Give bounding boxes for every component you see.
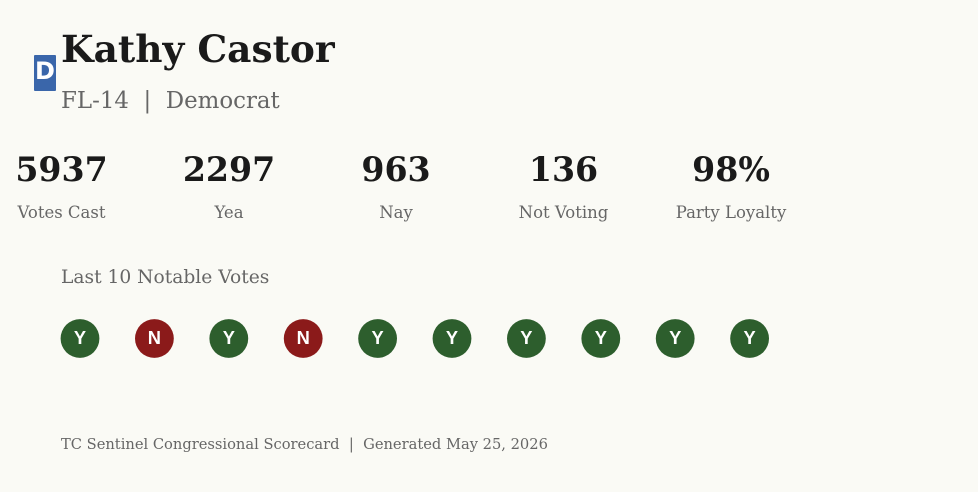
vote 6 yes: Y [446,327,458,348]
vote 6 yes [433,319,471,358]
vote 9 yes: Y [669,327,681,348]
vote 9 yes [656,319,695,358]
stat: party loyalty: 98% [692,150,770,189]
vote 1 yes [61,319,99,358]
vote 7 yes [507,319,546,358]
vote 8 yes [581,319,620,358]
party badge: D [35,57,55,85]
stat label: party loyalty: Party Loyalty [676,203,786,222]
stat: yea: 2297 [183,150,275,189]
vote 10 yes: Y [743,327,756,348]
stat label: nay: Nay [379,203,413,222]
vote 3 yes: Y [223,327,235,348]
vote 4 no: N [297,327,310,348]
vote 7 yes: Y [520,327,533,348]
vote 2 no [135,319,174,358]
stat: not voting: 136 [529,150,598,189]
vote 8 yes: Y [595,327,607,348]
stat label: not voting: Not Voting [519,203,608,222]
title: Kathy Castor [61,27,335,71]
stat label: yea: Yea [214,203,244,222]
vote 5 yes [358,319,397,358]
stat label: votes cast: Votes Cast [17,203,106,222]
vote 5 yes: Y [371,327,384,348]
vote 3 yes [209,319,248,358]
stat: votes cast: 5937 [15,150,108,189]
vote 1 yes: Y [74,327,86,348]
section heading: Last 10 Notable Votes [61,267,269,288]
vote 2 no: N [148,327,161,348]
stat: nay: 963 [361,150,431,189]
vote 4 no [284,319,323,358]
footer: TC Sentinel Congressional Scorecard | Generated May 25, 2026 [61,436,548,453]
vote 10 yes [730,319,769,358]
subtitle: FL-14 | Democrat [61,88,280,114]
